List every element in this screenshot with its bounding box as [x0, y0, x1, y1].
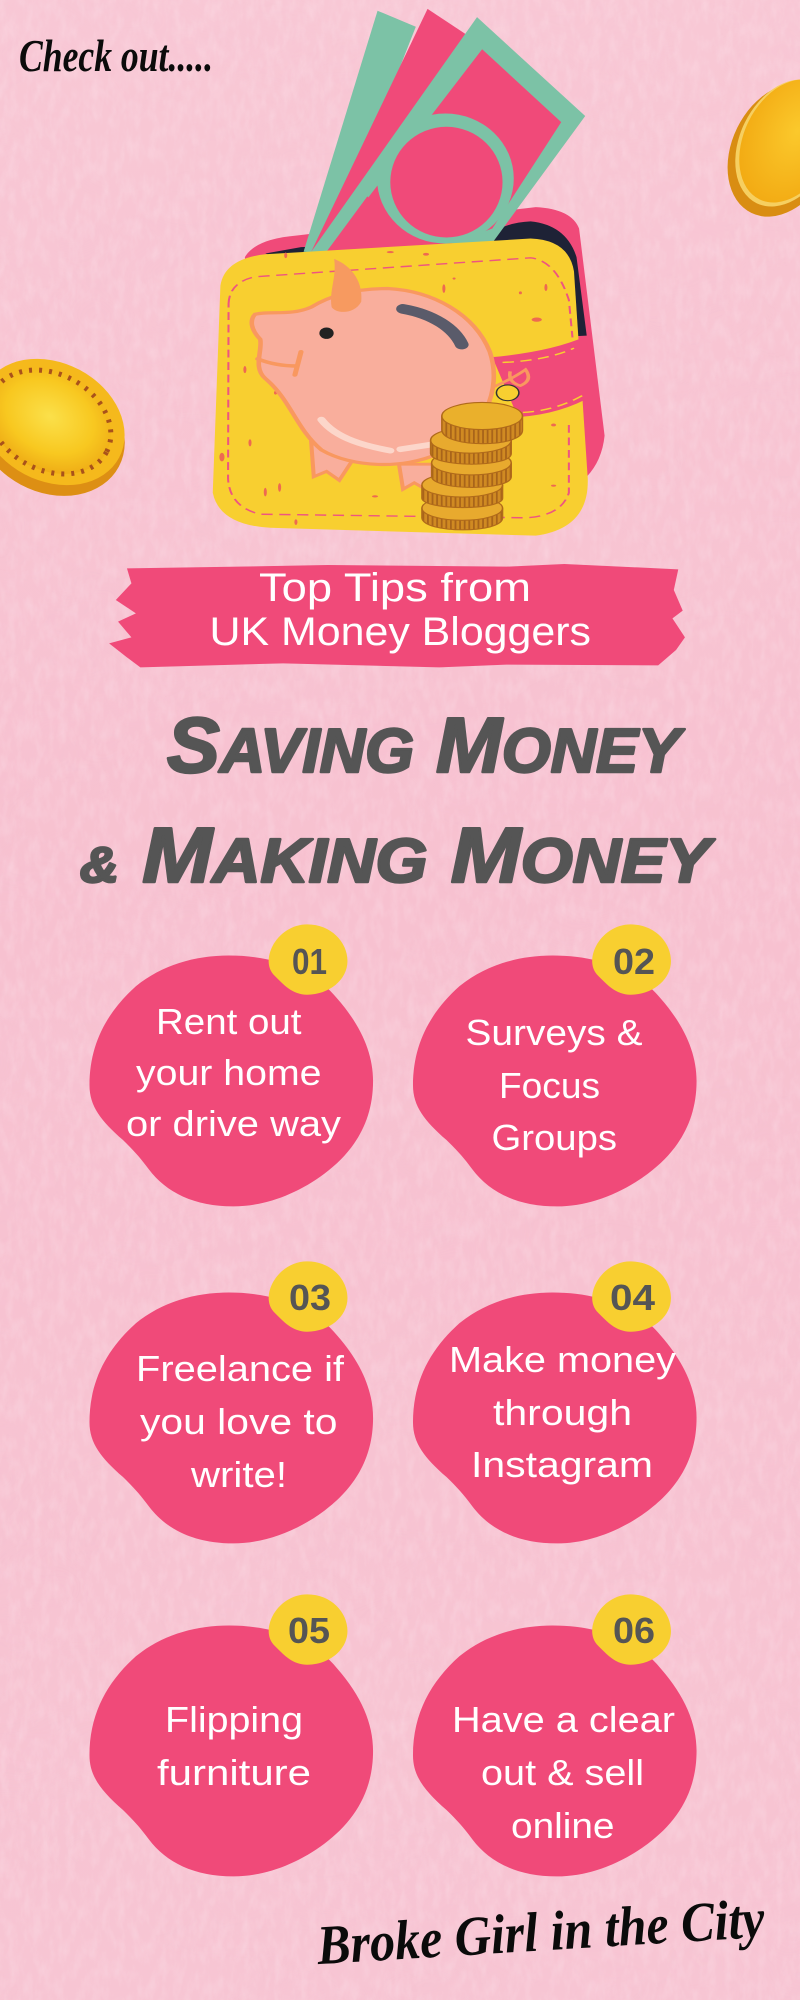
tip text: Rent out — [156, 1001, 302, 1042]
blob — [89, 1293, 373, 1543]
card 05 — [89, 1594, 373, 1876]
wallet strap — [492, 336, 594, 417]
banner: Top Tips from UK Money Bloggers — [109, 564, 685, 667]
tip text — [466, 1012, 642, 1158]
tip text — [126, 1001, 341, 1144]
tip text: out & sell — [481, 1752, 644, 1793]
number: 05 — [288, 1610, 330, 1651]
speckles — [219, 251, 556, 525]
brush stroke — [109, 564, 685, 667]
blob — [413, 956, 697, 1206]
blob — [413, 1626, 697, 1876]
tip text: or drive way — [126, 1103, 341, 1144]
card 02 — [413, 924, 697, 1206]
tip text: online — [511, 1805, 614, 1846]
badge — [592, 1594, 671, 1665]
banner: Top Tips from UK Money Bloggers: UK Money Bloggers — [210, 610, 591, 654]
tip text — [449, 1339, 676, 1485]
tip text: Freelance if — [136, 1348, 345, 1389]
badge — [269, 1261, 347, 1332]
tip text: Make money — [449, 1339, 676, 1380]
tip text: your home — [136, 1052, 322, 1093]
number: 06 — [613, 1610, 655, 1651]
number: 03 — [289, 1277, 331, 1318]
tip text: Flipping — [165, 1699, 303, 1740]
card 06 — [413, 1594, 697, 1876]
icon: gold coin, left — [0, 334, 148, 521]
card 01 — [89, 924, 373, 1206]
tip text: through — [493, 1392, 632, 1433]
title: and Making Money: & MAKING MONEY — [80, 811, 716, 899]
tip text: Have a clear — [452, 1699, 675, 1740]
blob — [89, 1626, 373, 1876]
icon: piggy bank — [252, 259, 528, 491]
text: Check out: Check out..... — [19, 30, 213, 81]
tip text: Surveys & — [466, 1012, 642, 1053]
number: 01 — [292, 941, 327, 982]
badge — [592, 924, 671, 995]
badge — [269, 1594, 347, 1665]
illustration: wallet with cash and piggy bank — [213, 9, 605, 536]
tip text: Instagram — [471, 1444, 653, 1485]
blob — [413, 1293, 697, 1543]
tip text — [136, 1348, 345, 1495]
icon: banknotes — [304, 9, 585, 254]
title: Saving Money: SAVING MONEY — [167, 701, 686, 789]
icon: gold coin, right — [706, 63, 800, 235]
blob — [89, 956, 373, 1206]
tip text: furniture — [157, 1752, 311, 1793]
wallet front — [213, 239, 588, 536]
tip text: you love to — [140, 1401, 338, 1442]
wallet back — [245, 207, 605, 500]
badge — [269, 924, 347, 995]
stitching — [228, 258, 584, 518]
number: 04 — [610, 1277, 655, 1318]
tip text: Focus — [499, 1065, 600, 1106]
badge — [592, 1261, 671, 1332]
icon: coin stack — [422, 402, 522, 530]
number: 02 — [613, 941, 655, 982]
tip text: write! — [190, 1454, 287, 1495]
banner text: Top Tips from — [259, 566, 531, 610]
tip text — [157, 1699, 311, 1793]
card 03 — [89, 1261, 373, 1543]
card 04 — [413, 1261, 697, 1543]
tip text: Groups — [492, 1117, 617, 1158]
tip text — [452, 1699, 675, 1846]
